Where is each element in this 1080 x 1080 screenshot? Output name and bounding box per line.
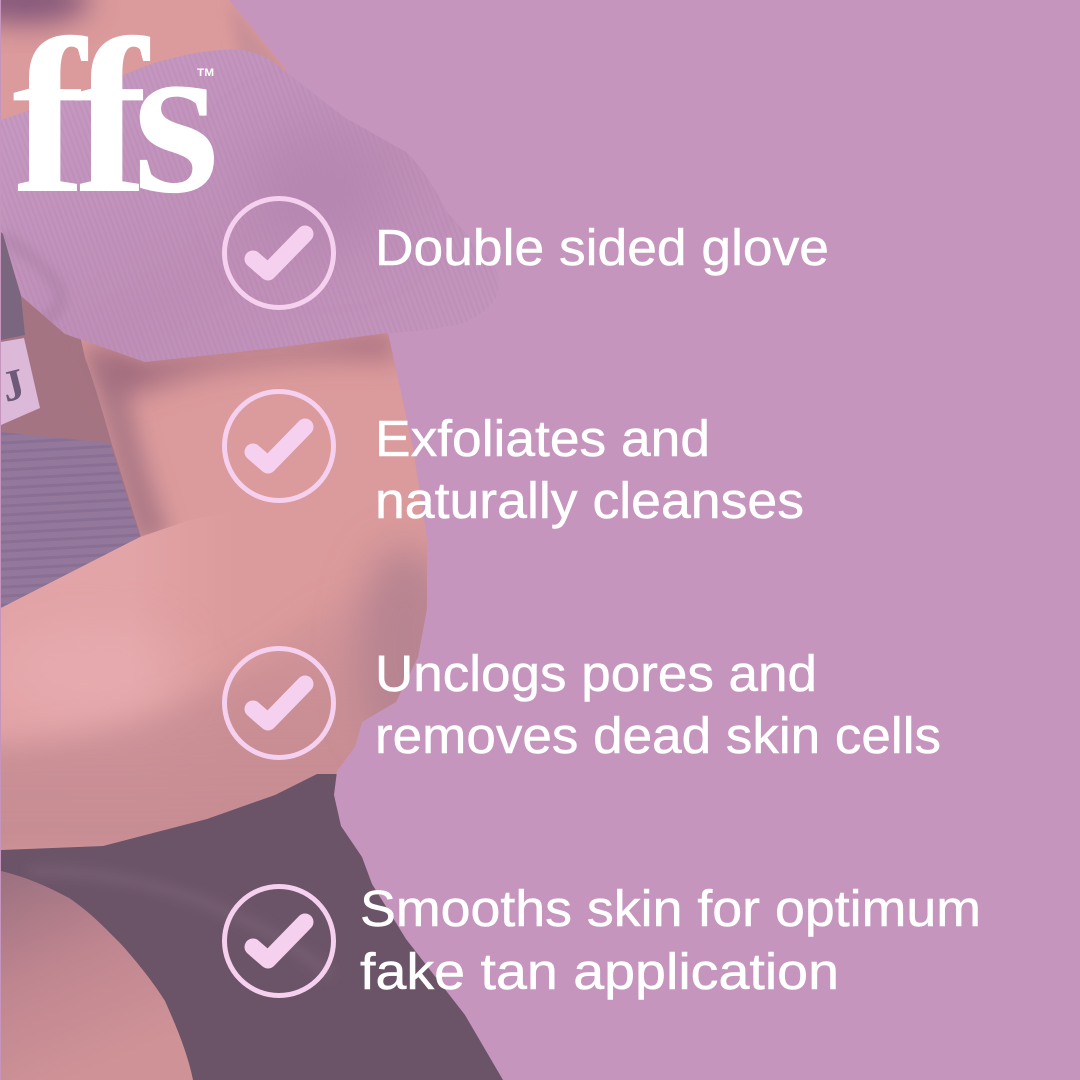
text: fake tan application xyxy=(360,943,839,1000)
icon: check circle xyxy=(224,198,334,308)
photo: forearm shading xyxy=(0,545,453,860)
photo: purple ribbed band xyxy=(1,432,140,608)
photo: glove xyxy=(1,50,486,362)
item 2: exfoliates xyxy=(224,392,804,529)
icon: check circle xyxy=(224,648,334,758)
text: removes dead skin cells xyxy=(375,707,941,764)
trademark: TM xyxy=(197,67,214,79)
photo: forearm xyxy=(1,482,424,774)
photo: briefs highlight fold xyxy=(30,872,330,975)
logo: ffs xyxy=(12,0,219,240)
forearm highlight xyxy=(0,630,175,710)
photo: shadow under glove xyxy=(90,332,400,392)
text: Exfoliates and xyxy=(375,410,710,467)
glove fabric xyxy=(1,50,388,362)
glove ribbing xyxy=(0,40,510,370)
elbow shade xyxy=(348,536,427,718)
glove gathered cuff xyxy=(5,235,61,318)
icon: check circle xyxy=(224,392,334,500)
item 3: unclogs pores xyxy=(224,645,941,764)
photo: garment label xyxy=(0,338,40,425)
photo: arm and torso xyxy=(0,0,520,1080)
item 4: smooths skin xyxy=(224,880,981,1000)
photo: dark briefs xyxy=(1,774,520,1080)
text: Smooths skin for optimum xyxy=(360,880,981,937)
photo: thigh xyxy=(1,871,193,1080)
photo: shoulder edge shade xyxy=(232,12,286,72)
icon: check circle xyxy=(224,886,334,996)
underside shade xyxy=(1,626,370,850)
photo: dark strap xyxy=(1,232,25,340)
logo: ffs: f xyxy=(74,0,151,240)
logo: ffs: s xyxy=(133,0,219,240)
photo: shoulder skin xyxy=(1,0,427,603)
item 1: double sided glove xyxy=(224,198,829,308)
logo: ffs: f xyxy=(12,0,89,240)
text xyxy=(375,410,804,529)
glove shade xyxy=(288,161,343,208)
text xyxy=(360,880,981,1000)
text xyxy=(375,645,941,764)
photo: arm fold soft shade xyxy=(80,340,170,545)
text: naturally cleanses xyxy=(375,472,804,529)
photo: dark top corner xyxy=(0,0,90,24)
text: Double sided glove xyxy=(375,219,829,276)
text: Unclogs pores and xyxy=(375,645,817,702)
photo: armpit shade xyxy=(0,290,142,540)
